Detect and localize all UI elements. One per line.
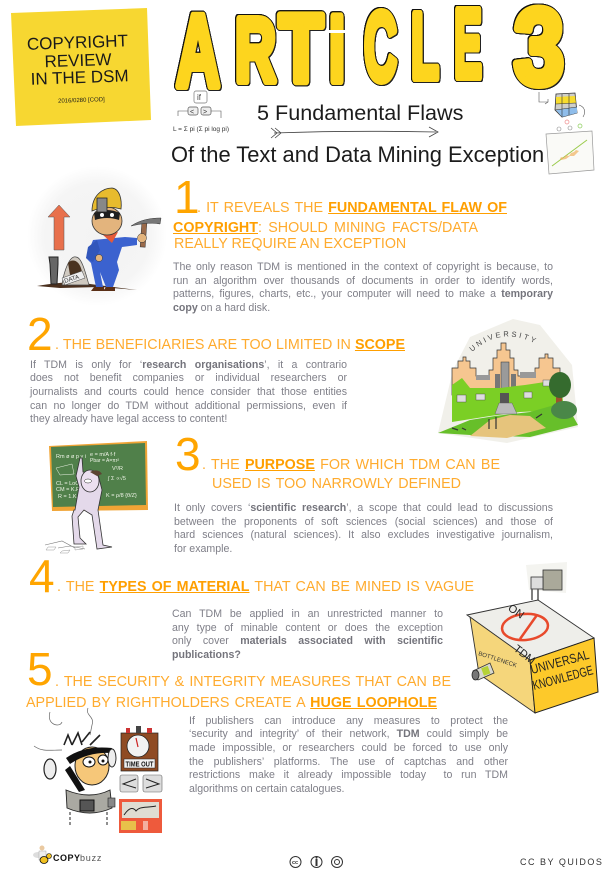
illustration: universal knowledge box: KNOWLEDGE <box>531 662 595 693</box>
heading: flaw 5 <box>26 674 451 711</box>
number 3: 3 <box>175 428 201 480</box>
illustration: blackboard and scientist: ∫ Σ ∝√5 <box>107 475 126 482</box>
text: flaw 2 body: they already have legal access to content! <box>30 413 227 425</box>
sticky note: copyright review: REVIEW <box>44 50 112 71</box>
icon: cube and scatter chart <box>538 92 594 174</box>
text: flaw 2 body: does not benefit companies or individual researchers or <box>30 372 347 384</box>
text: flaw 1 body: run an algorithm over thousands of documents in order to identify words, <box>173 275 553 287</box>
text: flaw 4 body: only cover materials associated with scientific <box>172 635 443 647</box>
illustration: blackboard and scientist: e = m/A f·f <box>90 452 116 458</box>
illustration: blackboard and scientist: Pbar = A=πr² <box>90 458 119 464</box>
doodle: decision tree and formula: > <box>203 109 207 116</box>
text: flaw 4 body: any type of minable content or does the exception <box>172 622 443 634</box>
heading: flaw 3: USED IS TOO NARROWLY DEFINED <box>212 476 461 492</box>
logo: Copybuzz: COPY <box>53 853 81 863</box>
credit: CC BY Quidos: CC BY QUIDOS <box>520 857 603 867</box>
sticky note: copyright review: 2016/0280 [COD] <box>58 97 105 105</box>
panel: flaw 1 <box>37 171 553 314</box>
illustration: blackboard and scientist: K = ρ/8 {θ/Z} <box>106 493 137 499</box>
illustration: gagged researcher, clock, buttons, card <box>34 708 162 833</box>
heading: flaw 1: . IT REVEALS THE FUNDAMENTAL FLAW OF <box>197 200 507 216</box>
heading: flaw 1: COPYRIGHT: SHOULD MINING FACTS/DATA <box>173 220 478 236</box>
text: flaw 4 body: publications? <box>172 649 241 661</box>
arrow <box>270 126 439 138</box>
text: flaw 2 body: If TDM is only for ‘research organisations’, it a contrario <box>30 358 347 370</box>
heading: flaw 1 <box>173 200 507 252</box>
number 1: 1 <box>174 171 200 223</box>
logo: Copybuzz: buzz <box>80 853 102 863</box>
illustration: universal knowledge box: NO <box>506 601 527 620</box>
doodle: decision tree and formula: < <box>190 109 194 116</box>
title: Article 3: R <box>235 1 276 101</box>
heading: flaw 5: APPLIED BY RIGHTHOLDERS CREATE A HUGE LOOPHOLE <box>26 695 437 711</box>
text: flaw 1 body <box>173 261 553 314</box>
text: flaw 5 body: restrictions make it already impossible today to run TDM <box>189 769 508 781</box>
illustration: blackboard and scientist <box>45 441 148 554</box>
subtitle: 5 Fundamental Flaws: 5 Fundamental Flaws <box>257 100 463 125</box>
illustration: universal knowledge box: BOTTLENECK <box>477 651 517 669</box>
subtitle: Of the Text and Data Mining Exception: Of the Text and Data Mining Exception <box>171 142 544 167</box>
text: flaw 1 body: patterns, figures, charts, etc., your computer will need to make a temporary <box>173 288 553 300</box>
text: flaw 3 body <box>174 502 553 555</box>
heading: flaw 4: . THE TYPES OF MATERIAL THAT CAN BE MINED IS VAGUE <box>57 579 474 595</box>
text: flaw 3 body: between the proponents of soft sciences (social sciences) and those of <box>174 516 553 528</box>
panel: flaw 2 <box>27 308 578 443</box>
panel: flaw 3 <box>45 428 553 555</box>
illustration: blackboard and scientist: Rm ø ø p y i <box>56 454 86 460</box>
text: flaw 1 body: copy on a hard disk. <box>173 302 270 314</box>
text: flaw 3 body: for example. <box>174 543 232 555</box>
illustration: blackboard and scientist: CM = K.RAP <box>56 487 88 493</box>
text: flaw 5 body: If publishers can introduce any measures to protect the <box>189 714 508 726</box>
illustration: university: UNIVERSITY <box>469 331 536 351</box>
text: flaw 5 body: ‘security and integrity’ of their network, TDM could simply be <box>189 728 508 740</box>
heading: flaw 2: . THE BENEFICIARIES ARE TOO LIMITED IN SCOPE <box>55 337 405 353</box>
illustration: university <box>438 319 578 443</box>
sticky note: copyright review <box>11 8 151 126</box>
text: flaw 4 body <box>172 608 443 661</box>
illustration: blackboard and scientist: CL = LoGR <box>56 481 83 487</box>
illustration: blackboard and scientist: V²/R <box>112 466 123 472</box>
doodle: decision tree and formula: L = Σ pi (Σ pi log pi) <box>173 126 229 133</box>
text: flaw 5 body <box>189 714 508 795</box>
text: flaw 2 body: can no longer do TDM without additional permissions, even if <box>30 400 347 412</box>
doodle: decision tree and formula <box>173 90 229 133</box>
icons: creative commons: cc <box>292 860 298 866</box>
illustration: miner with data pile <box>37 180 162 292</box>
heading: flaw 1: REALLY REQUIRE AN EXCEPTION <box>174 236 406 252</box>
text: flaw 3 body: hard sciences (natural sciences). It also excludes investigative journalism, <box>174 529 553 541</box>
text: flaw 5 body: algorithms on certain catalogues. <box>189 783 344 795</box>
heading: flaw 3 <box>202 457 500 492</box>
heading: flaw 5: . THE SECURITY & INTEGRITY MEASURES THAT CAN BE <box>55 674 451 690</box>
text: flaw 2 body: journalists and courts could hence consider that those entities <box>30 386 347 398</box>
icons: creative commons <box>290 856 343 868</box>
text: flaw 1 body: The only reason TDM is mentioned in the context of copyright is because, to <box>173 261 553 273</box>
panel: flaw 5 <box>26 643 508 833</box>
illustration: blackboard and scientist: R = 1.K <box>58 494 77 500</box>
sticky note: copyright review: IN THE DSM <box>30 66 129 89</box>
text: flaw 5 body: the publishers’ platforms. The use of captchas and other <box>189 756 508 768</box>
doodle: decision tree and formula: if <box>197 93 202 102</box>
text: flaw 5 body: made impossible, or researchers could be forced to use only <box>189 742 508 754</box>
logo: Copybuzz <box>33 846 102 864</box>
text: flaw 4 body: Can TDM be applied in an unrestricted manner to <box>172 608 443 620</box>
title: Article 3 <box>174 0 566 108</box>
number 5: 5 <box>27 643 53 695</box>
number 4: 4 <box>29 550 55 602</box>
illustration: universal knowledge box: UNIVERSAL <box>529 647 591 677</box>
illustration: universal knowledge box: TDM <box>511 643 537 667</box>
number 2: 2 <box>27 308 53 360</box>
heading: flaw 3: . THE PURPOSE FOR WHICH TDM CAN BE <box>202 457 500 473</box>
text: flaw 2 body <box>30 358 347 425</box>
panel: flaw 4 <box>29 550 598 714</box>
illustration: universal knowledge box <box>466 562 598 714</box>
illustration: miner with data pile: DATA <box>64 275 80 285</box>
sticky note: copyright review: COPYRIGHT <box>27 31 128 54</box>
illustration: gagged researcher, clock, buttons, card: TIME OUT <box>126 762 154 768</box>
text: flaw 3 body: It only covers ‘scientific research’, a scope that could lead to discussions <box>174 502 553 514</box>
